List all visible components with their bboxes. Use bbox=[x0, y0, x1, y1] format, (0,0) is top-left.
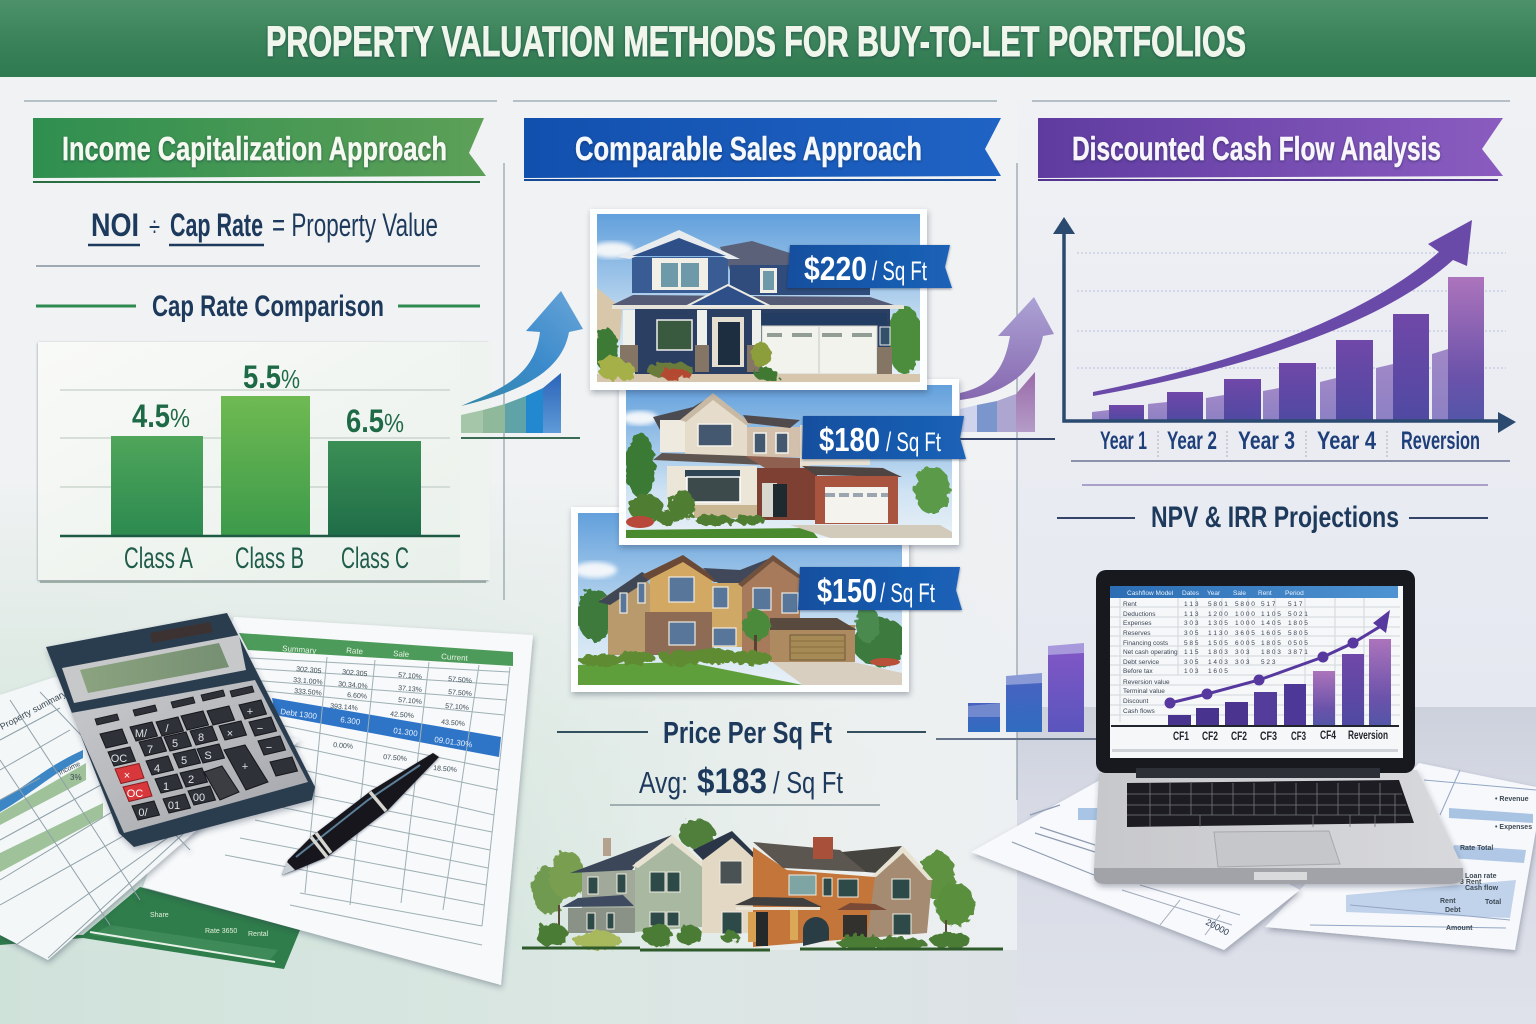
screen table text: 1 0 3 bbox=[1184, 668, 1199, 675]
laptop axis labels: CF2 bbox=[1202, 729, 1218, 743]
average price per sq ft: Avg: bbox=[639, 765, 688, 800]
screen table text: Terminal value bbox=[1123, 688, 1165, 695]
paper: main spreadsheet: Summary bbox=[282, 644, 317, 655]
screen table text: 5 2 3 bbox=[1261, 659, 1276, 666]
average price per sq ft bbox=[610, 762, 880, 805]
screen table text: 1 2 0 0 bbox=[1208, 611, 1228, 618]
calculator keys: 8 bbox=[198, 732, 204, 744]
bar: class A: 4.5 bbox=[132, 398, 170, 434]
class labels bbox=[124, 542, 409, 575]
paper: main spreadsheet: 302.305 bbox=[296, 666, 322, 675]
laptop bars bbox=[1168, 639, 1391, 725]
paper: right report: • Revenue bbox=[1495, 796, 1529, 803]
formula: NOI bbox=[91, 207, 139, 243]
screen table text: 1 1 3 bbox=[1184, 611, 1199, 618]
screen table text: Net cash operating bbox=[1123, 649, 1178, 656]
screen table text: Financing costs bbox=[1123, 640, 1169, 647]
calculator keys: 01 bbox=[168, 800, 180, 812]
paper: main spreadsheet: 42.50% bbox=[390, 711, 414, 720]
calculator keys: S bbox=[204, 750, 212, 762]
laptop trend line bbox=[1164, 610, 1390, 708]
screen table text: 5 1 7 bbox=[1261, 601, 1276, 608]
laptop axis labels: CF3 bbox=[1260, 729, 1277, 743]
screen table text: Reserves bbox=[1123, 630, 1151, 637]
screen table text: 3 0 5 bbox=[1184, 659, 1199, 666]
icon: purple growth arrow bbox=[960, 297, 1055, 439]
formula bbox=[88, 207, 438, 245]
paper: right report: Loan rate bbox=[1465, 873, 1497, 880]
screen table text: 1 8 0 3 bbox=[1261, 649, 1281, 656]
icon: pen bbox=[282, 753, 439, 875]
paper: main spreadsheet: 07.50% bbox=[383, 754, 407, 763]
screen table text: 1 1 5 bbox=[1184, 649, 1199, 656]
paper: right report: Rate Total bbox=[1460, 845, 1493, 852]
screen table text: 5 0 2 1 bbox=[1288, 611, 1308, 618]
paper: main spreadsheet: 43.50% bbox=[441, 719, 465, 728]
paper: main spreadsheet: 57.10% bbox=[398, 697, 422, 706]
calculator keys: 5 bbox=[181, 755, 187, 767]
icon: small 3d bars bbox=[936, 643, 1100, 739]
screen table text: 5 8 0 0 bbox=[1235, 601, 1255, 608]
period labels: Year 2 bbox=[1167, 427, 1217, 455]
screen table text: Discount bbox=[1123, 698, 1148, 705]
laptop axis labels: CF3 bbox=[1291, 729, 1306, 743]
calculator keys: 4 bbox=[154, 763, 160, 775]
heading: price per sq ft: Price Per Sq Ft bbox=[663, 715, 832, 750]
screen table text: 1 5 0 5 bbox=[1208, 640, 1228, 647]
bar: class C: 6.5 bbox=[346, 403, 384, 439]
price tag: $220 bbox=[787, 245, 952, 288]
calculator keys: 00 bbox=[193, 792, 205, 804]
calculator keys: − bbox=[257, 723, 263, 735]
screen table text: Cash flows bbox=[1123, 708, 1156, 715]
screen table text bbox=[1123, 590, 1308, 715]
paper: rear spreadsheet: Property summary bbox=[0, 688, 68, 732]
paper: main spreadsheet: 57.50% bbox=[448, 689, 472, 698]
paper: right report: Amount bbox=[1446, 925, 1473, 932]
screen table text: 6 0 0 5 bbox=[1235, 640, 1255, 647]
period labels bbox=[1100, 427, 1480, 455]
paper: right report: • Expenses bbox=[1495, 824, 1532, 831]
paper: rear spreadsheet bbox=[0, 677, 300, 960]
screen table text: 0 5 0 5 bbox=[1288, 640, 1308, 647]
price tag: $180: / Sq Ft bbox=[886, 427, 941, 457]
calculator keys: − bbox=[266, 742, 272, 754]
screen table text: 3 8 7 1 bbox=[1288, 649, 1308, 656]
price tag: $150: / Sq Ft bbox=[880, 578, 935, 608]
calculator keys: × bbox=[227, 728, 233, 740]
green folder: Rate 3650 bbox=[205, 928, 237, 935]
heading ribbon: comparable sales: Comparable Sales Approach bbox=[575, 130, 922, 167]
screen table text: 1 1 0 5 bbox=[1261, 611, 1281, 618]
paper: main spreadsheet: 6.60% bbox=[347, 692, 367, 701]
average price per sq ft: $183 bbox=[697, 762, 767, 801]
screen table text: 5 8 0 1 bbox=[1208, 601, 1228, 608]
calculator keys: OC bbox=[127, 788, 143, 800]
screen table text: Dates bbox=[1182, 590, 1200, 597]
bar: class C bbox=[328, 403, 421, 536]
photo: $150 house bbox=[571, 507, 962, 692]
bar: class A: % bbox=[170, 403, 190, 433]
paper: main spreadsheet: 302.305 bbox=[342, 669, 368, 678]
price tag: $150 bbox=[798, 567, 962, 610]
paper: main spreadsheet: Current bbox=[441, 652, 469, 663]
laptop axis labels: CF4 bbox=[1320, 728, 1336, 742]
calculator keys: 0/ bbox=[138, 807, 149, 819]
screen table text: 1 1 3 0 bbox=[1208, 630, 1228, 637]
paper: right report: Total bbox=[1485, 899, 1501, 906]
panel: discounted cash flow analysis bbox=[936, 118, 1536, 950]
green folder: Share bbox=[150, 912, 169, 919]
screen table text: 3 0 3 bbox=[1235, 649, 1250, 656]
paper: rear spreadsheet: 3% bbox=[70, 773, 82, 782]
calculator keys bbox=[95, 686, 298, 820]
keyboard bbox=[1127, 780, 1414, 827]
screen table text: Cashflow Model bbox=[1127, 590, 1174, 597]
heading ribbon: discounted cash flow bbox=[1038, 118, 1503, 180]
laptop base bbox=[1094, 770, 1463, 884]
chart: cash flow projection bbox=[1053, 217, 1516, 461]
formula: ÷ bbox=[149, 211, 160, 242]
panel: income capitalization approach bbox=[33, 118, 490, 582]
screen table text: 5 8 5 bbox=[1184, 640, 1199, 647]
laptop axis labels: CF2 bbox=[1231, 729, 1247, 743]
formula: = Property Value bbox=[272, 207, 438, 243]
screen table text: 1 6 0 5 bbox=[1208, 668, 1228, 675]
calculator keys: + bbox=[247, 706, 253, 718]
photo: $180 house bbox=[619, 379, 966, 545]
paper: main spreadsheet: Sale bbox=[393, 649, 410, 659]
price tag: $220: / Sq Ft bbox=[872, 256, 927, 286]
heading: NPV and IRR projections: NPV & IRR Projections bbox=[1151, 501, 1399, 534]
period labels: Year 4 bbox=[1317, 427, 1376, 455]
paper: main spreadsheet: Debt 1300 bbox=[280, 707, 318, 721]
screen table text: 1 3 0 5 bbox=[1208, 620, 1228, 627]
screen table text: 3 0 3 bbox=[1184, 620, 1199, 627]
laptop axis labels: Reversion bbox=[1348, 728, 1388, 742]
screen table text: 5 8 0 5 bbox=[1288, 630, 1308, 637]
paper: main spreadsheet: 37.13% bbox=[398, 685, 422, 694]
illustration: row of houses bbox=[522, 819, 1003, 950]
paper: main spreadsheet: 333.50% bbox=[294, 688, 322, 697]
bar: class B: 5.5 bbox=[243, 359, 281, 395]
bars by period bbox=[1092, 277, 1484, 421]
paper: right report: Rent bbox=[1440, 898, 1456, 905]
icon: calculator bbox=[46, 613, 315, 847]
price tag: $220: $220 bbox=[804, 250, 867, 287]
screen table text: Reversion value bbox=[1123, 679, 1170, 686]
screen table text: 1 8 0 5 bbox=[1261, 640, 1281, 647]
bar: class B: % bbox=[281, 364, 300, 394]
screen table text: 1 6 0 5 bbox=[1261, 630, 1281, 637]
class labels: Class A bbox=[124, 542, 193, 575]
screen table text: 1 8 0 3 bbox=[1208, 649, 1228, 656]
paper: right report: Cash flow bbox=[1465, 885, 1499, 892]
calculator keys: 7 bbox=[147, 744, 153, 756]
cap rate comparison heading: Cap Rate Comparison bbox=[152, 290, 384, 323]
heading ribbon: income capitalization: Income Capitalization Approach bbox=[62, 130, 447, 167]
screen table text: 1 1 3 bbox=[1184, 601, 1199, 608]
screen table text: Debt service bbox=[1123, 659, 1160, 666]
calculator keys: × bbox=[124, 770, 130, 782]
calculator keys: 5 bbox=[172, 738, 178, 750]
screen table text: 1 4 0 5 bbox=[1261, 620, 1281, 627]
bar chart: cap rate by class bbox=[38, 342, 490, 582]
bar: class C: % bbox=[384, 408, 404, 438]
screen table text: 5 1 7 bbox=[1288, 601, 1303, 608]
laptop screen bbox=[1096, 570, 1415, 778]
photo: $220 house bbox=[590, 209, 952, 390]
bar: class B bbox=[221, 359, 310, 536]
paper: main spreadsheet bbox=[143, 617, 533, 985]
panel: comparable sales approach bbox=[522, 118, 1003, 950]
title banner bbox=[0, 0, 1536, 77]
paper: left report: 20000 bbox=[1204, 917, 1231, 938]
formula: Cap Rate bbox=[170, 207, 263, 243]
calculator keys: OC bbox=[111, 753, 127, 765]
laptop axis labels bbox=[1173, 728, 1388, 743]
screen table text: Year bbox=[1207, 590, 1221, 597]
green folder: Rental bbox=[248, 931, 269, 938]
screen table text: Expenses bbox=[1123, 620, 1152, 627]
touchpad bbox=[1214, 831, 1340, 867]
paper: main spreadsheet: 6.300 bbox=[340, 715, 361, 727]
price tag: $180 bbox=[802, 416, 966, 459]
screen table text: Before tax bbox=[1123, 668, 1153, 675]
average price per sq ft: / Sq Ft bbox=[773, 765, 843, 800]
icon: laptop bbox=[1094, 570, 1463, 884]
paper: main spreadsheet: 57.50% bbox=[448, 676, 472, 685]
calculator keys: + bbox=[242, 761, 248, 773]
calculator keys: M/ bbox=[135, 728, 148, 740]
period labels: Year 1 bbox=[1100, 427, 1147, 455]
trend arrow bbox=[1093, 220, 1472, 396]
heading ribbon: income capitalization bbox=[33, 118, 486, 182]
screen table text: 3 0 5 bbox=[1184, 630, 1199, 637]
class labels: Class B bbox=[235, 542, 304, 575]
calculator keys: / bbox=[165, 723, 169, 735]
illustration: spreadsheets and calculator bbox=[0, 613, 533, 985]
screen table text: 3 6 0 5 bbox=[1235, 630, 1255, 637]
icon: blue growth arrow bbox=[461, 291, 583, 438]
paper: main spreadsheet: 18.50% bbox=[433, 765, 457, 774]
paper: main spreadsheet: 57.10% bbox=[398, 672, 422, 681]
bar: class A bbox=[111, 398, 203, 536]
screen table text: 1 8 0 5 bbox=[1288, 620, 1308, 627]
price tag: $150: $150 bbox=[817, 572, 877, 609]
heading ribbon: comparable sales bbox=[524, 118, 1001, 180]
paper: main spreadsheet: 01.300 bbox=[393, 726, 419, 738]
screen table text: Deductions bbox=[1123, 611, 1156, 618]
paper: right report: Debt bbox=[1445, 907, 1461, 914]
paper: main spreadsheet: 0.00% bbox=[333, 742, 353, 751]
screen table text: 1 0 0 0 bbox=[1235, 611, 1255, 618]
calculator keys: 1 bbox=[163, 781, 169, 793]
period labels: Year 3 bbox=[1238, 427, 1295, 455]
screen table text: 3 0 3 bbox=[1235, 659, 1250, 666]
paper: main spreadsheet: 33.1.00% bbox=[293, 677, 323, 687]
paper: main spreadsheet: 393.14% bbox=[330, 703, 358, 712]
screen table text: Rent bbox=[1258, 590, 1272, 597]
class labels: Class C bbox=[341, 542, 409, 575]
green folder bbox=[0, 887, 300, 969]
period labels: Reversion bbox=[1401, 427, 1480, 455]
paper: left report bbox=[971, 780, 1300, 950]
axes bbox=[1064, 230, 1505, 421]
screen table text: 1 0 0 0 bbox=[1235, 620, 1255, 627]
paper: main spreadsheet: Rate bbox=[346, 646, 364, 656]
laptop axis labels: CF1 bbox=[1173, 729, 1189, 743]
paper: rear spreadsheet: Income bbox=[58, 761, 82, 777]
screen table text: Period bbox=[1285, 590, 1304, 597]
price tag: $180: $180 bbox=[819, 421, 880, 458]
paper: right report: 3 Rent bbox=[1460, 879, 1482, 886]
screen table text: 1 4 0 3 bbox=[1208, 659, 1228, 666]
paper: main spreadsheet: 57.10% bbox=[445, 703, 469, 712]
screen table text: Rent bbox=[1123, 601, 1137, 608]
screen table text: Sale bbox=[1233, 590, 1246, 597]
paper: main spreadsheet: 09.01.30% bbox=[434, 735, 473, 749]
paper: main spreadsheet: 30.34.0% bbox=[338, 681, 368, 691]
calculator keys: 2 bbox=[188, 774, 194, 786]
paper: right report bbox=[1265, 763, 1536, 950]
